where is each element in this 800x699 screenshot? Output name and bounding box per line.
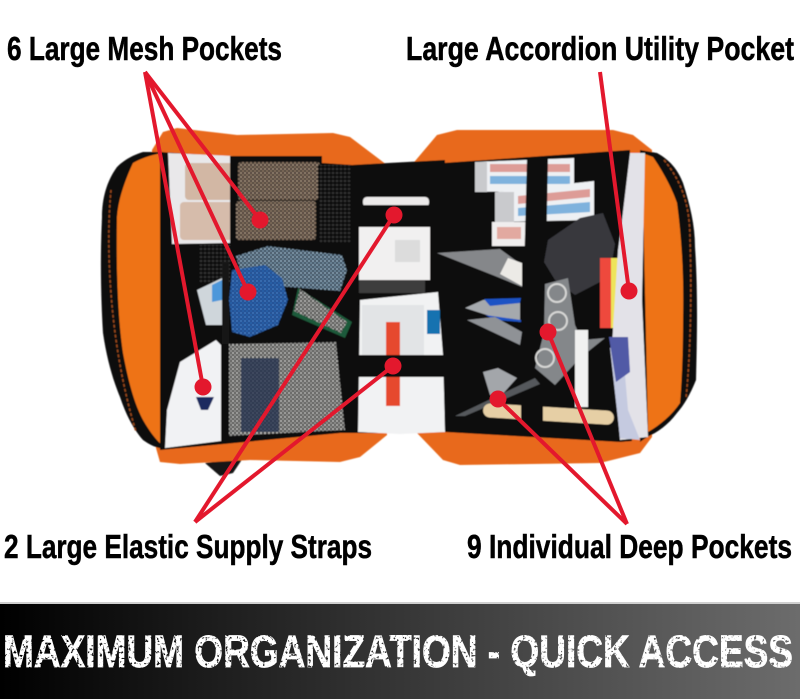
vertical strap	[520, 158, 548, 425]
left interior	[160, 152, 382, 450]
elastic strap bottom	[353, 355, 445, 377]
footer banner	[0, 602, 800, 699]
small packet and scissors	[455, 368, 540, 416]
right panel orange shell	[410, 130, 697, 465]
scissors and forceps bag	[535, 278, 605, 407]
wooden tongue depressor	[483, 403, 614, 425]
mesh pocket with bandages	[230, 156, 350, 244]
mesh pocket with gauze	[229, 342, 345, 436]
black side pocket	[200, 245, 230, 283]
callout lines: 6 large mesh pockets	[145, 72, 268, 396]
strap over depressor	[521, 393, 543, 427]
mesh pocket with blue pouch	[197, 246, 352, 344]
label: 6 large mesh pockets: 6 Large Mesh Pockets	[7, 30, 282, 67]
callout lines: deep pockets	[490, 324, 627, 524]
bandage roll	[359, 197, 430, 293]
bandage packets	[475, 158, 594, 246]
elastic strap top	[353, 205, 445, 227]
white cold pack	[165, 340, 221, 448]
packed tools	[437, 249, 522, 345]
right interior	[437, 150, 648, 442]
shoulder strap under bag	[205, 458, 243, 476]
left panel orange shell	[101, 128, 387, 464]
accordion pocket documents	[609, 153, 648, 440]
gloves bag	[544, 213, 615, 295]
callout line: accordion pocket	[600, 72, 638, 300]
backpack	[101, 128, 697, 476]
red and yellow packet	[600, 258, 618, 328]
label: elastic supply straps: 2 Large Elastic Supply Straps	[4, 528, 372, 565]
callout lines: elastic straps	[195, 206, 402, 522]
emergency blanket packs	[358, 292, 445, 434]
centre column	[352, 160, 445, 434]
